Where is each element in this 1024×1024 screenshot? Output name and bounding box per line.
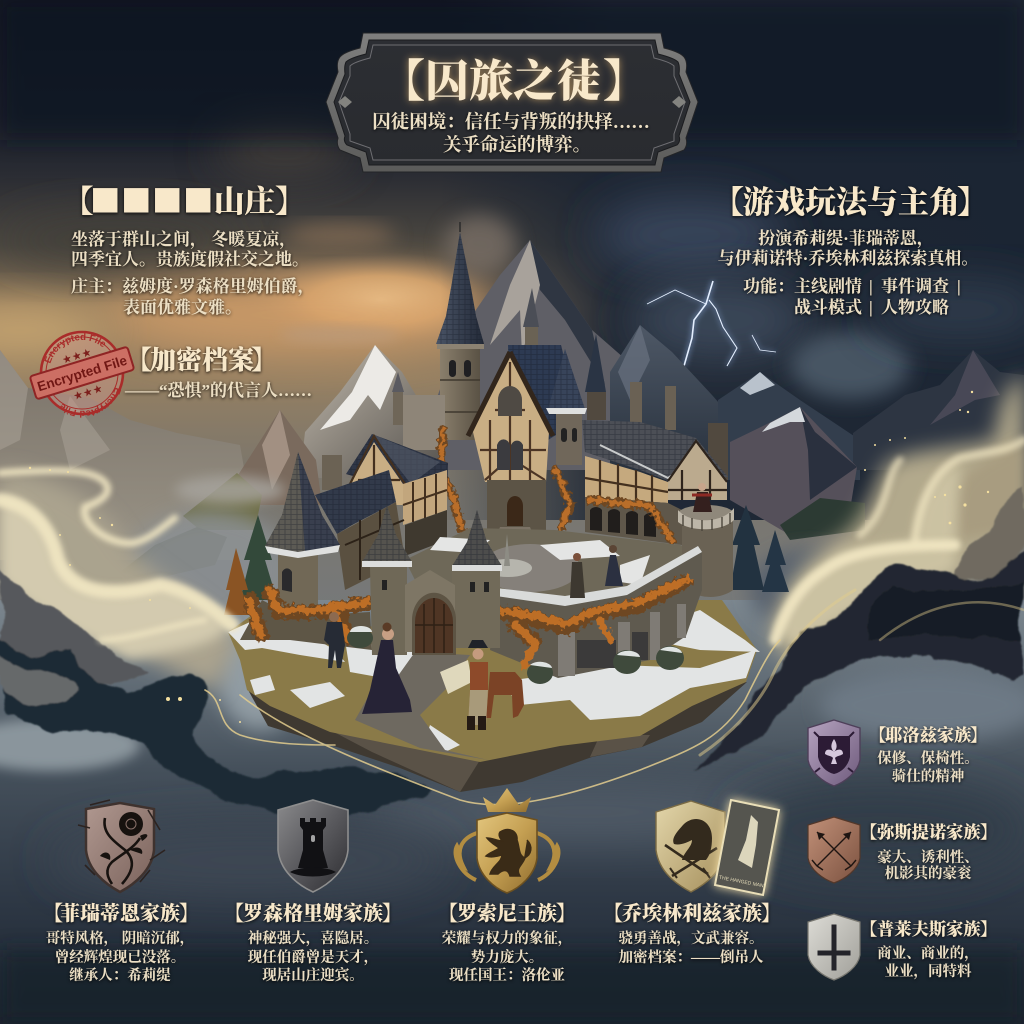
gameplay description: | xyxy=(869,298,873,317)
lightning bolts xyxy=(647,281,776,366)
house description: 现任国王：洛伦亚 xyxy=(449,966,565,984)
castle xyxy=(240,222,734,684)
stamp: encrypted file: Encrypted File xyxy=(44,333,106,364)
house title: 】 xyxy=(980,920,997,939)
gameplay heading: 【 xyxy=(713,185,744,220)
crest: purple fleur de lis xyxy=(808,720,860,786)
house: Ferretti xyxy=(43,800,199,984)
lower slate wash xyxy=(0,600,1024,1024)
stamp: encrypted file xyxy=(30,330,134,418)
encrypted archive text xyxy=(124,345,312,400)
house title: 乔埃林利兹家族 xyxy=(622,901,762,925)
ivy on curtain wall xyxy=(248,578,688,665)
house title: 【 xyxy=(603,902,623,925)
house description: 势力庞大。 xyxy=(471,948,543,966)
gatehouse xyxy=(362,505,502,655)
encrypted archive text: 加密档案 xyxy=(150,345,254,375)
title: 囚旅之徒 xyxy=(425,57,601,106)
house title: 】 xyxy=(761,902,781,925)
house title: 】 xyxy=(556,902,576,925)
rear small spire xyxy=(392,288,539,450)
house description xyxy=(877,749,979,785)
stamp: encrypted file: ★ ★ ★ xyxy=(62,348,92,365)
estate heading: 【 xyxy=(63,185,94,219)
stamp: encrypted file: Encrypted File xyxy=(60,388,122,418)
house description xyxy=(46,929,194,984)
house: Prefus xyxy=(808,914,997,980)
gameplay description xyxy=(718,228,978,317)
subtitle xyxy=(372,111,650,156)
man in dark coat xyxy=(324,612,345,668)
stamp: encrypted file: ★ ★ ★ xyxy=(73,384,103,401)
drifting mist xyxy=(125,476,870,730)
curtain wall xyxy=(240,546,702,678)
house title: 】 xyxy=(179,902,199,925)
gameplay description: | xyxy=(957,277,961,296)
gameplay description: | xyxy=(869,277,873,296)
floating island xyxy=(228,600,760,792)
tarot card: the hanged man xyxy=(715,800,779,895)
gameplay description: 战斗模式 xyxy=(794,297,862,317)
title plaque xyxy=(326,33,698,172)
title: 】 xyxy=(603,57,647,106)
house title: 】 xyxy=(980,823,997,842)
gameplay description: 扮演希莉缇·菲瑞蒂恩， xyxy=(758,228,934,249)
stamp: encrypted file: Encrypted File xyxy=(35,353,129,394)
mountain range xyxy=(0,240,1024,580)
house title: 【 xyxy=(860,823,877,842)
gameplay text block xyxy=(713,185,988,317)
house title: 】 xyxy=(970,726,987,745)
encrypted archive text: 【 xyxy=(126,346,152,375)
estate description xyxy=(71,229,315,317)
house description: 业业，同特料 xyxy=(884,962,972,980)
gold sparkles xyxy=(29,391,989,723)
crest: black tower xyxy=(278,800,348,892)
distant spruce trees xyxy=(224,505,789,615)
gameplay heading: 游戏玩法与主角 xyxy=(743,185,960,220)
main tower xyxy=(436,222,484,440)
estate heading: ■■■■ xyxy=(90,177,214,221)
gameplay description: 事件调查 xyxy=(881,276,949,296)
estate description: 四季宜人。贵族度假社交之地。 xyxy=(71,249,309,269)
gameplay heading: 】 xyxy=(957,185,988,220)
house description: 机影其的豪衮 xyxy=(884,864,972,882)
crest: horse and swords xyxy=(656,801,725,892)
ivy on walls xyxy=(440,430,672,540)
house: Rosengrim xyxy=(224,800,402,984)
house description xyxy=(877,848,979,882)
house description: 曾经辉煌现已没落。 xyxy=(55,948,185,966)
estate heading: 】 xyxy=(275,185,306,219)
subtitle: 关乎命运的博弈。 xyxy=(443,134,591,156)
house title: 耶洛兹家族 xyxy=(885,725,971,745)
house title: 普莱夫斯家族 xyxy=(877,919,981,939)
estate description: 庄主：兹姆度·罗森格里姆伯爵， xyxy=(71,276,315,297)
house description: 荣耀与权力的象征， xyxy=(442,929,572,947)
house description: 神秘强大，喜隐居。 xyxy=(248,929,378,947)
gameplay description: 主线剧情 xyxy=(794,276,862,296)
house description: 豪大、诱利性、 xyxy=(877,848,979,866)
house title: 【 xyxy=(224,902,244,925)
front gold wisps xyxy=(0,440,1024,805)
crest: rose and thorns xyxy=(78,800,165,892)
gameplay description: 功能： xyxy=(743,276,794,296)
central hall xyxy=(468,345,580,542)
estate description: 表面优雅文雅。 xyxy=(123,297,242,317)
right wing xyxy=(582,382,728,545)
house title: 【 xyxy=(860,920,877,939)
hall turrets xyxy=(546,334,606,465)
round balcony tower xyxy=(678,505,734,597)
crest: crowned gold lion xyxy=(456,788,558,893)
shrubs xyxy=(347,626,684,684)
house description: 哥特风格， 阴暗沉郁， xyxy=(46,929,194,947)
encrypted archive text: 】 xyxy=(251,346,277,375)
house: Rossini royal xyxy=(438,788,576,984)
man with map and horse xyxy=(440,640,524,730)
swirling mist left xyxy=(0,470,240,690)
snow patches xyxy=(228,610,760,752)
house description: 商业、商业的， xyxy=(877,945,979,962)
estate heading: 山庄 xyxy=(214,185,275,219)
house description xyxy=(877,945,979,980)
left wing xyxy=(315,434,448,590)
house title: 】 xyxy=(382,902,402,925)
estate description: 坐落于群山之间， 冬暖夏凉， xyxy=(71,229,296,250)
estate text block xyxy=(63,177,315,317)
subtitle: 囚徒困境：信任与背叛的抉择…… xyxy=(372,111,650,133)
house description xyxy=(248,929,378,984)
cobblestone path xyxy=(355,652,488,760)
house: Joellintz xyxy=(603,800,781,966)
house description: 骑仕的精神 xyxy=(892,767,965,785)
house description: 现任伯爵曾是天才， xyxy=(248,948,378,966)
crest: crossed arrows xyxy=(808,817,860,883)
gameplay description: 与伊莉诺特·乔埃林利兹探索真相。 xyxy=(718,248,978,268)
balcony figure xyxy=(692,483,712,512)
house title: 菲瑞蒂恩家族 xyxy=(60,901,180,925)
house: Yeluozi xyxy=(808,720,987,786)
dark ink swirls xyxy=(0,490,1024,816)
courtyard xyxy=(405,528,700,600)
house title: 弥斯提诺家族 xyxy=(877,822,981,842)
house description: 保修、保椅性。 xyxy=(877,749,979,767)
house description xyxy=(618,929,764,966)
house description xyxy=(442,929,572,984)
lady in dark dress xyxy=(362,622,412,714)
house title: 罗索尼王族 xyxy=(457,901,557,925)
tarot card: the hanged man: THE HANGED MAN xyxy=(718,875,764,889)
house description: 骁勇善战，文武兼容。 xyxy=(618,929,764,947)
house description: 加密档案：——倒吊人 xyxy=(618,948,764,966)
courtyard figures xyxy=(570,545,623,598)
house description: 继承人：希莉缇 xyxy=(69,966,171,984)
house title: 罗森格里姆家族 xyxy=(243,901,383,925)
house description: 现居山庄迎宾。 xyxy=(262,966,364,984)
house: Misitino xyxy=(808,817,997,883)
swirling mist right xyxy=(770,375,1024,670)
far left cone tower xyxy=(265,452,340,612)
house title: 【 xyxy=(438,902,458,925)
crest: inverted cross xyxy=(808,914,860,980)
title: 【 xyxy=(381,57,425,106)
encrypted archive text: ——“恐惧”的代言人…… xyxy=(124,380,312,400)
house title: 【 xyxy=(43,902,63,925)
house title: 【 xyxy=(869,726,886,745)
gameplay description: 人物攻略 xyxy=(881,298,949,317)
figures xyxy=(324,483,712,730)
